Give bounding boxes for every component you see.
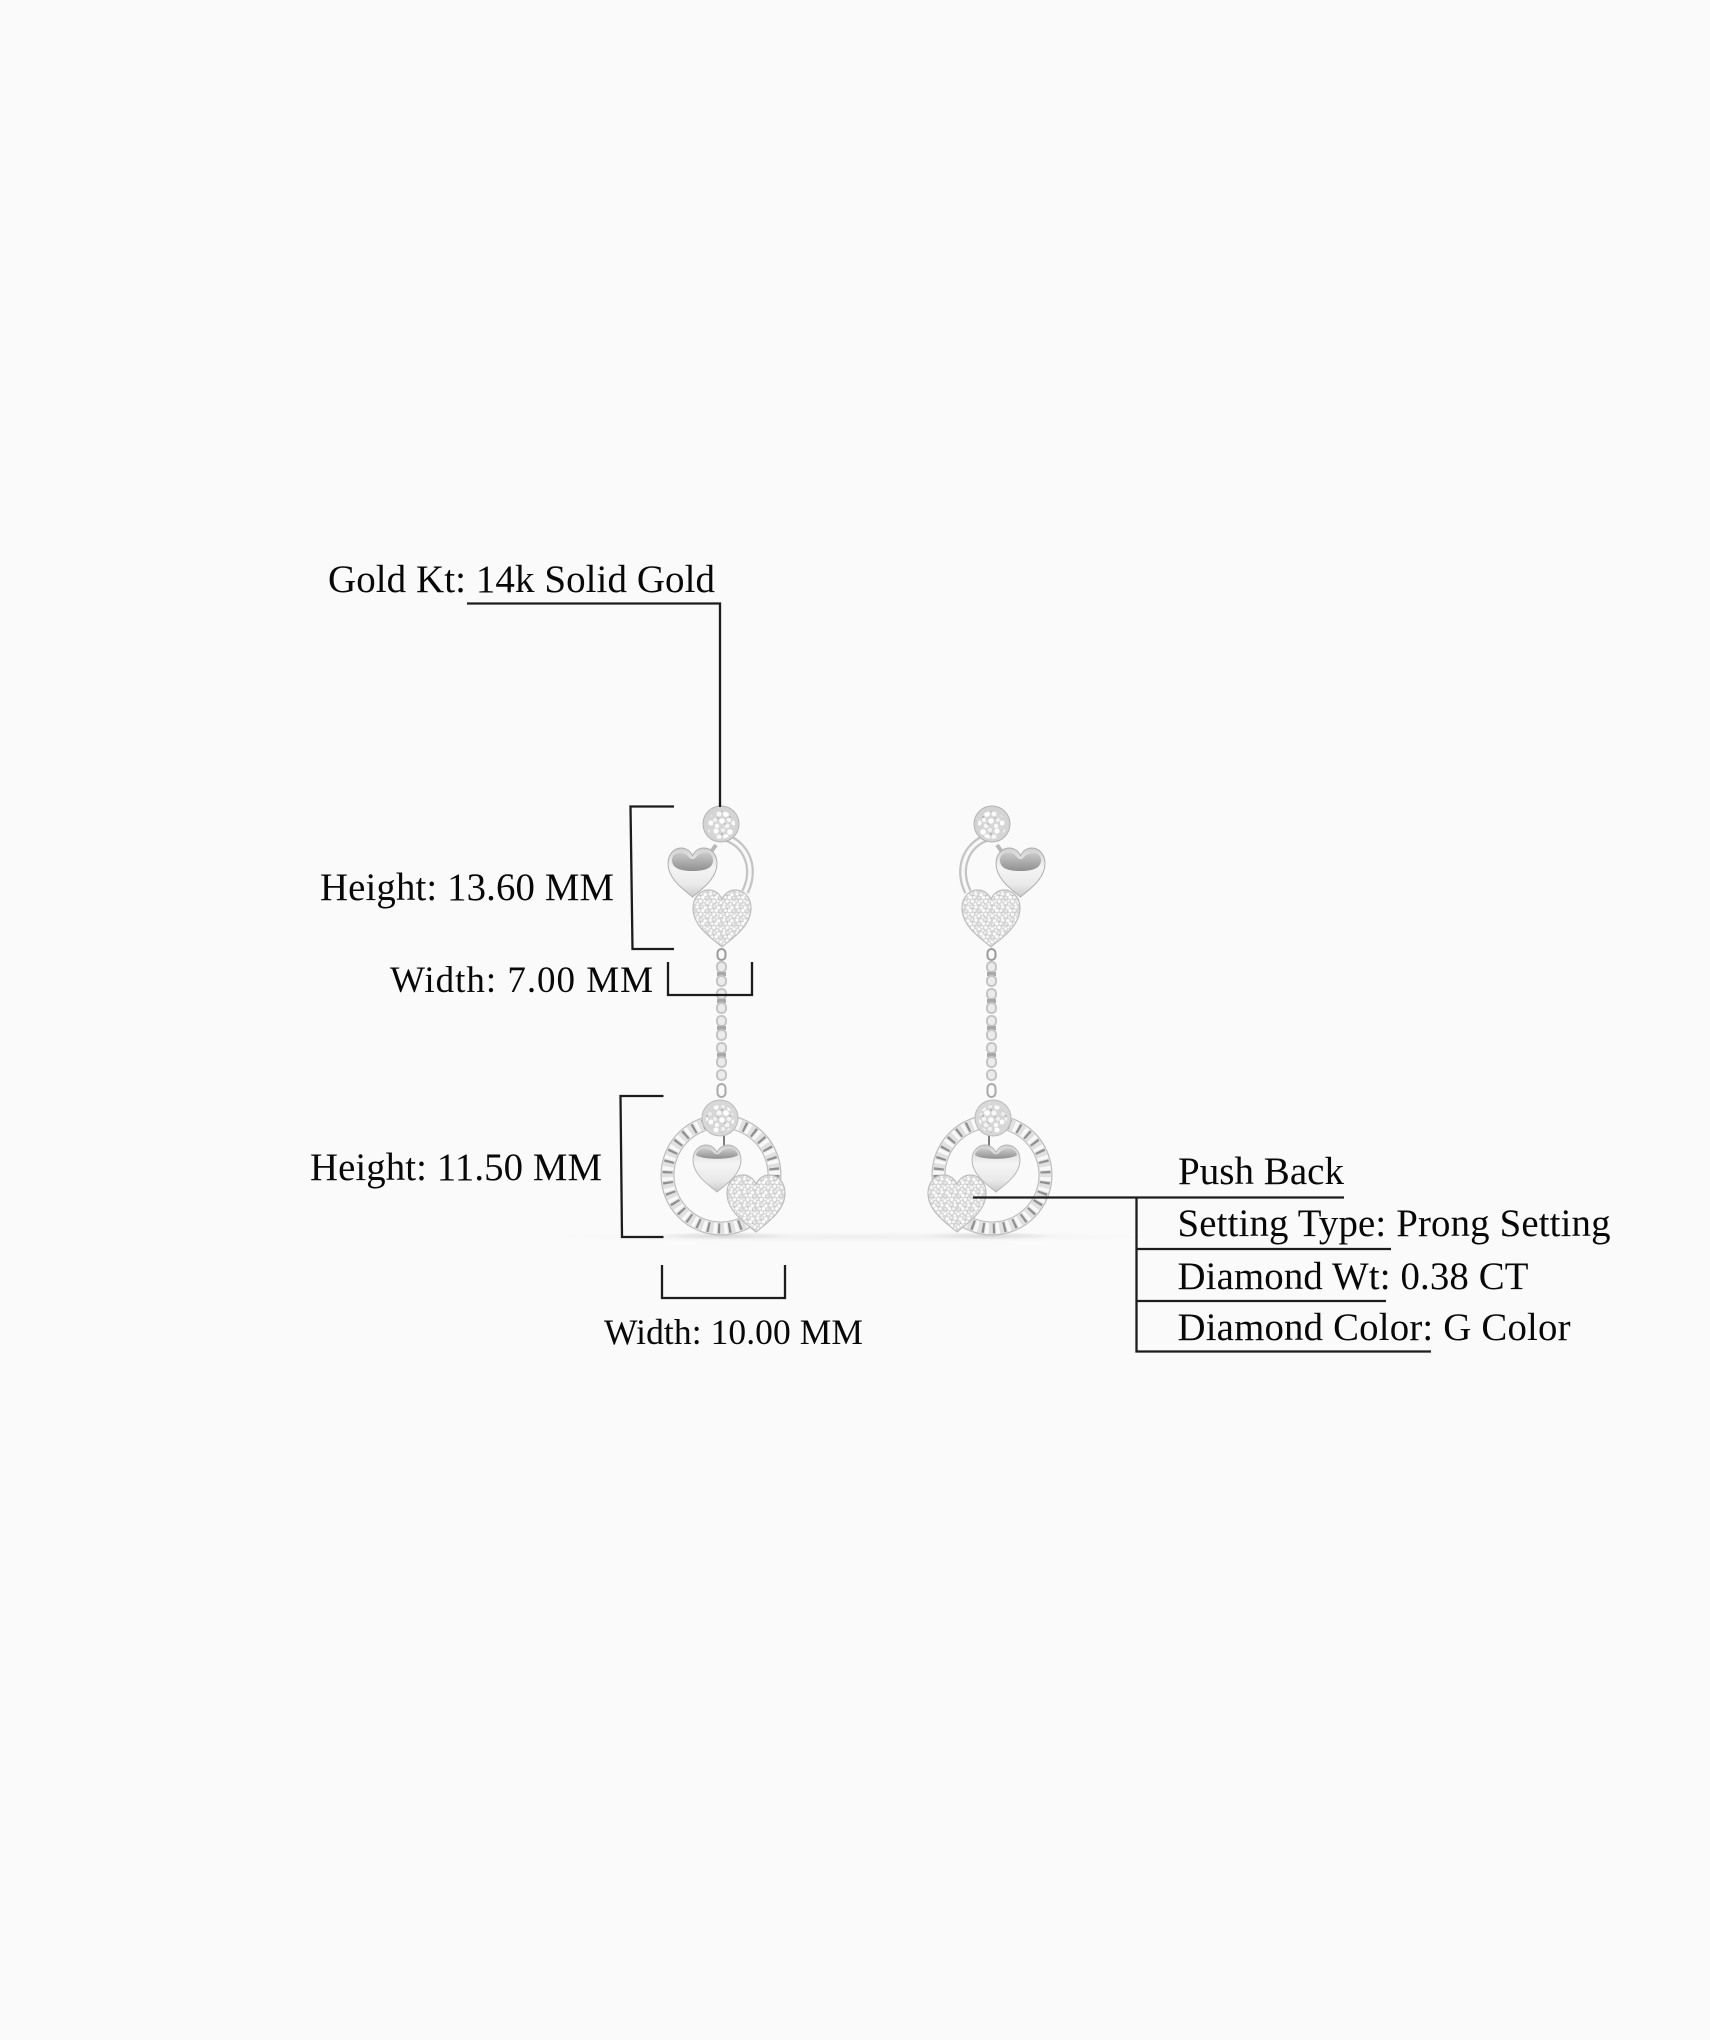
dimension: drop height bbox=[310, 1096, 664, 1237]
leader lines bbox=[973, 1198, 1431, 1352]
callout: specifications list bbox=[973, 1150, 1610, 1352]
diamond weight: Diamond Wt: 0.38 CT bbox=[1178, 1255, 1529, 1298]
dimension: top height: Height: 13.60 MM bbox=[320, 866, 614, 909]
ground shadow bbox=[516, 1231, 1196, 1243]
dimension: drop width: Width: 10.00 MM bbox=[604, 1312, 863, 1352]
push back: Push Back bbox=[1178, 1150, 1344, 1193]
dimension: drop width bbox=[604, 1265, 863, 1352]
dimension: top width: Width: 7.00 MM bbox=[390, 960, 653, 1001]
left earring bbox=[661, 806, 785, 1235]
right earring bbox=[928, 806, 1052, 1235]
callout: gold karat bbox=[328, 558, 720, 807]
dimension: drop height: Height: 11.50 MM bbox=[310, 1146, 602, 1189]
setting type: Setting Type: Prong Setting bbox=[1178, 1202, 1610, 1245]
callout: gold karat: Gold Kt: 14k Solid Gold bbox=[328, 558, 716, 601]
dimension: top height bbox=[320, 806, 674, 949]
diamond color: Diamond Color: G Color bbox=[1178, 1306, 1571, 1349]
